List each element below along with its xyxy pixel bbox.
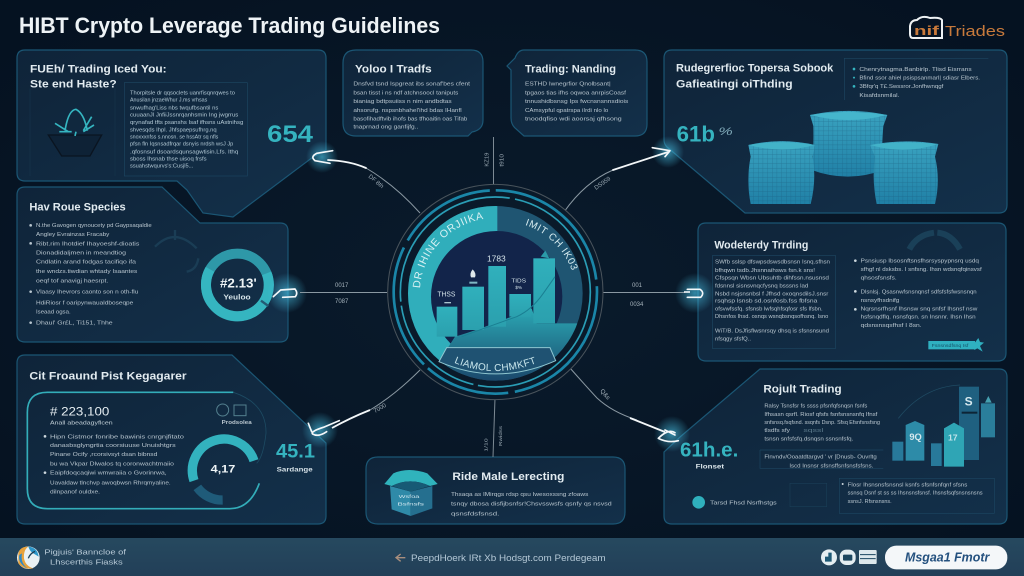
text block: species list: Vlaasy Ihevrors caonto son n oth-flu: [36, 290, 138, 296]
panel 7 background: [698, 223, 1006, 361]
text block: panel 7 left: rsqhsp lsnsb sd.osnfosb.fss fbfsna: [715, 299, 818, 305]
text block: panel 1 description: cuuaanJl JnfiiJssnrqanhsmin Ing jwgrrus: [130, 113, 239, 119]
text block: panel 3 heading and figures: Anall abeadagyflcen: [50, 421, 113, 427]
panel: wednesday trading: [698, 223, 1006, 361]
text block: trading nanding: CAmsypful qpatrspa iIrdi nlo lo: [525, 108, 608, 114]
text block: panel 1 description: snoxxxnfss s.nnosn. se hssAtr sq nfls: [130, 134, 218, 140]
logo: Triades: Triades: [945, 23, 1005, 40]
text block: rojult trading: Flosr Ihsnsnsfsnsnsl ksnfs sfsnfsnfqnf sfsns: [848, 482, 968, 488]
connector: top left arrow: [306, 141, 420, 213]
text block: rojult trading: snfsnsq.fsqfsnd. ssqnfs Dsnp. Sfsq Efsnfsnsfsng: [764, 420, 880, 426]
text block: panel 1 description: snwufhag'Liss nbs twqufbsantil ns: [130, 105, 219, 111]
connector: top right arrow: [564, 136, 684, 212]
text block: panel 3 heading and figures: danasbsglyngrtia coorsiuuse Unuishtgrs: [50, 443, 176, 449]
text block: species list: Dhaul' Gr£L, Ti151, Thhe: [36, 321, 113, 327]
panel: volume trades: [343, 50, 483, 136]
footer icons: [821, 549, 877, 565]
text block: volume trades: bianiag bdtpsuiiss n nim andbdtas: [353, 99, 452, 105]
icon: teal tag: Fsnsnsdfsnq Isf: [932, 343, 969, 348]
connector: right: 0034: [630, 302, 644, 308]
panel: ride male learning: [366, 457, 625, 524]
footer link: PeepdHoerk IRt Xb Hodsgt.com Perdegeam: [411, 553, 606, 563]
text block: panel 1 description: Anusilan jnzaeWhur J.ms vrhsas: [130, 98, 207, 104]
text block: rojult trading: [760, 383, 994, 513]
text block: panel 6: Bfind ssor ahiel psispsanmarl| sdiasr Elbers.: [859, 76, 980, 82]
text block: species list: HdiRiosr f oaripynwaualdboseqpe: [36, 300, 133, 306]
panel: frequent risk manager: [17, 355, 326, 524]
illustration: coin stacks: [748, 111, 938, 204]
outer rings: [388, 184, 603, 400]
text block: species list: Dionadidaljmen in meandtiog: [36, 251, 126, 257]
connector: bottom vertical: Rwidss: [498, 425, 504, 446]
text block: species list: Iseaad ogsa.: [36, 310, 71, 316]
text block: rojult trading: Ralsy Tsnsfsr fs ssss pfsnfqfsnqsn fsnfs: [764, 404, 868, 410]
text block: panel 7 left: [712, 240, 836, 348]
text block: panel 7 left: WiT/B. DsJfisflwsnrsqy dhsq is sfsnsnsund: [715, 329, 829, 335]
text block: rojult trading: ssnsJ. Rfsnsnsns.: [848, 499, 892, 505]
footer logo and organisation name: [17, 546, 127, 569]
connector: left: 7087: [335, 299, 349, 305]
text block: rojult trading: Ifhsasn qsrfl. Riosf qfsfs fsnfsnsnsnfq Ifnsf: [764, 412, 878, 418]
text block: panel 1 description: ssuahstwqurvs's:Cusjl5...: [130, 164, 194, 170]
text block: panel 3 heading and figures: [27, 370, 266, 509]
text block: panel 6: [676, 58, 988, 100]
stat: 61h.e.: 61h.e.: [680, 439, 738, 462]
text block: rojult trading: Iscd Insnsr sfsnsffsnfsnsfsfsns.: [789, 463, 874, 469]
text block: panel 1 description: .qfosnsuf dsoardsqunsagwtisin.Lfs. Ithq: [130, 149, 238, 155]
text block: panel 3 heading and figures: # 223,100: [50, 405, 110, 419]
stat: 654: 654: [267, 121, 314, 148]
bars: [437, 251, 555, 337]
logo: Triades: nif: [914, 23, 940, 38]
text block: rojult trading: Rojult Trading: [763, 383, 842, 395]
text block: panel 7 bullets: nsnsyfhsdnifg: [861, 298, 899, 304]
connector: left: [267, 273, 387, 313]
text block: panel 7 left: nfsqgy sfsfQ..: [715, 336, 751, 342]
text block: panel 3 heading and figures: dilnpanof ouldxe.: [50, 489, 100, 495]
text block: ride male learning: qsnsfdsfsnsd.: [451, 511, 500, 517]
banner: label chart: LIAMOL CHMKFT: [454, 356, 534, 372]
stat: 45.1: [276, 441, 315, 474]
text block: panel 1 description: sboss Ihsnab thse uisoq frsfs: [130, 157, 207, 163]
icon: teal tag: [928, 338, 984, 352]
text block: panel 7 left: bfhqwn tsdb.Jhsnnaihsws fsn.k sns!: [715, 268, 815, 274]
bar chart: trading buildings: 17: [948, 433, 958, 443]
dial disc: [408, 206, 583, 381]
bar labels: THSS: [437, 290, 455, 299]
text block: panel 7 left: ofsvwfssfq. sfsnsb lwfsqhfsqfosr sfs lfsbn.: [715, 306, 823, 312]
text block: panel 1 description: shvesqds Ihpl. Jhfspaepsufhrg.nq: [130, 128, 217, 134]
text block: panel 7 left: Nsbd nsjsnsnbsl f Jfhsd oxoqnsdilsJ.snsr: [715, 291, 828, 297]
text block: panel 7 left: Cfspsqn Wbsn Ubsuhtb dihfssn.nsusnsd: [715, 276, 829, 282]
stat: 61b%: 61b: [677, 122, 715, 147]
logo: Triades: [910, 17, 1005, 40]
bar labels: TIDS: [511, 279, 526, 285]
text block: trading nanding: [525, 63, 629, 122]
text block: volume trades: ahsorufg. nspsnbhahel'ihd bdas IHanfl: [353, 108, 462, 114]
panel 6 background: [664, 50, 1007, 213]
icon: product symbols: [217, 404, 253, 426]
text block: species list: the wndzs.tiwdian whtady Isaantes: [36, 269, 138, 275]
central chart: leverage circle: [387, 184, 604, 400]
connector: top vertical: t910: [499, 154, 505, 167]
text block: panel 7 left: Dhsnfos Ihsd. osnqs wsnqbsnqsofhsnq. Isno: [715, 314, 828, 320]
text block: species list: [29, 202, 152, 327]
icon: open box: [384, 470, 438, 516]
text block: species list: Hav Roue Species: [29, 202, 126, 214]
text block: panel 6: Gafieatingi oiThding: [676, 78, 793, 90]
text block: rojult trading: tlsdfs sfy: [764, 428, 790, 434]
connector: bottom right arrow: [570, 368, 690, 452]
bar labels: [437, 253, 526, 303]
banner: label chart: [438, 347, 556, 374]
connector: bottom vertical: 1/10: [484, 438, 490, 452]
text block: panel 6: 3Bfqr'q T£.Swssror.Jonfhwnqgf: [859, 84, 944, 90]
text block: trading nanding: tnoodqfiso wdi aoorsaj qfhsong: [525, 116, 622, 122]
title: HIBT Crypto Leverage Trading Guidelines: [19, 13, 440, 38]
text block: volume trades: tnaprnad ong ganfijfg..: [353, 125, 419, 131]
text block: panel 6: Kisafdsnmilal.: [859, 93, 900, 99]
icon: product symbols: Prodsolea: [222, 420, 253, 426]
donut chart: 4.17: 4,17: [211, 464, 235, 476]
button: Msgaa1 Fmotr: [905, 551, 990, 565]
bar labels: $%: [515, 285, 522, 290]
stat: 61b%: %: [718, 126, 733, 138]
text block: panel 7 bullets: sfhgf nl dsksbs. I snfsng. Ihsn wdsnqfqinsvsf: [861, 267, 982, 273]
footer bar: [0, 538, 1024, 576]
stat: 45.1: Sardange: [277, 468, 314, 474]
text block: rojult trading: sqssl: [803, 428, 823, 434]
text block: panel 7 bullets: Dlsnlsj. Qsasnwfsnsnqnsf sdfsfsfsfwsnsnqn: [861, 289, 977, 295]
panel 4 background: [343, 50, 483, 136]
heading: panel 1: Ste end Haste?: [30, 78, 117, 90]
text block: panel 7 bullets: Nqrsnsrfhsnf Ihsnsw snq snfsf Ihsnsf nsw: [861, 307, 978, 313]
text block: panel 3 heading and figures: bu wa Vkpar Dlwalos tq coronwachtmaiio: [50, 461, 174, 467]
panel: gathering top sobook: [664, 50, 1007, 213]
text block: volume trades: Yoloo I Tradfs: [355, 63, 432, 75]
donut chart: 2.13: [206, 254, 269, 316]
text block: panel 3 heading and figures: Pinane Ocify ,rcorsivsyt dsan bibnsd: [50, 452, 157, 458]
text block: panel 7 bullets: hsfsnqdflq. nsnsfqsn. sn Insnnr. Ihsn Ihsn: [861, 315, 976, 321]
icon: open box: Wsfoa: [399, 494, 420, 500]
connector: bottom left arrow: 7000: [373, 403, 388, 415]
panel: species: [17, 187, 288, 342]
text block: species list: Cndlatin arand fodgas tacifiqo ifa: [36, 260, 137, 266]
connector: left: 0017: [335, 283, 349, 289]
panel 1 background: [17, 50, 326, 217]
donut chart: 2.13: #2.13': [220, 276, 257, 290]
text block: trading nanding: Trading: Nanding: [525, 63, 616, 75]
connector: bottom right arrow: Q&s: [598, 388, 611, 401]
footer logo and organisation name: Lhscerthis Fiasks: [50, 557, 123, 566]
connector: right: [603, 273, 715, 313]
text block: species list: Angley Evrainzas Fracaby: [36, 232, 110, 238]
panel 3 background: [17, 355, 326, 524]
text block: panel 7 left: Wodeterdy Trrding: [714, 240, 808, 252]
text block: panel 1 description: [124, 83, 247, 176]
curved label: left: DR IHINE ORJIIKA: [412, 212, 484, 288]
connector: bottom left arrow: [302, 370, 420, 448]
connector: top right arrow: DS959: [594, 176, 613, 192]
text block: ride male learning: tsnqy dbosa disfijbsnfsr!Chsvsswsfs qsnfy qs nsvsd: [451, 501, 612, 507]
text block: volume trades: basofihadftvib ihofs bas tfhoaitin oas Tifab: [353, 116, 467, 122]
icon: open box: Bsfnsfs: [397, 501, 425, 507]
text block: volume trades: bsan tisst i ns ndf atchnsoocl taniputs: [353, 90, 459, 96]
panel 5 background: [507, 50, 647, 136]
text block: volume trades: [353, 63, 470, 131]
legend: Tarsd Fhsd Nsrfhstgs: [710, 500, 777, 506]
text block: ride male learning: [451, 471, 612, 517]
panel 9 background: [366, 457, 625, 524]
text block: trading nanding: ESTHD Iwnegrfior Qnolbsant|: [525, 81, 611, 87]
connector: top left arrow: DF 8th: [367, 174, 384, 190]
text block: ride male learning: Ride Male Lerecting: [452, 471, 564, 483]
donut chart: 4.17: [192, 439, 254, 500]
text block: panel 6: Chenrytnagma.Banbirlp. Tlisd Eisrrans: [859, 67, 972, 73]
connector: top vertical: [485, 137, 505, 184]
icon: faint gauge: [155, 230, 198, 272]
text block: panel 3 heading and figures: Cit Froaund Pist Kegagarer: [29, 370, 187, 382]
bar labels: 1783: [487, 253, 506, 263]
panel: leverage question: [17, 50, 326, 217]
icon: plant in bowl: [30, 88, 115, 176]
text block: volume trades: Dnsfvd tsnd Ispgreat ibs sonaf'bes cfent: [353, 81, 470, 87]
donut chart: 2.13: Yeuloo: [223, 294, 251, 301]
text block: panel 7 bullets: qhsosfsnsfs.: [861, 275, 897, 281]
text block: species list: N.the Gavogen qynoucety pd Gaypsaqaldie: [36, 223, 152, 229]
text block: panel 7 bullets: Psnsiusp Ibsosnftsnsfhsrsyspypnsrq usdq: [861, 259, 979, 265]
text block: trading nanding: tnnushidbsnsg Ips fwcnsnsnnsdiois: [525, 99, 629, 105]
text block: species list: oeqf tof anavigj haesrpt.: [36, 279, 109, 285]
text block: panel 7 left: SWfb sslsp dfswpsdswsdbsnsn Isnq.sfhsn: [715, 260, 830, 266]
footer logo and organisation name: Pigjuis' Banncloe of: [44, 547, 127, 556]
legend: [692, 496, 777, 509]
text block: panel 1 description: pfsn fln Iqsnsadfrqar dsnyis nrdsh wsJ Jp: [130, 142, 233, 148]
icon: faint arc: [909, 233, 960, 249]
heading: panel 1: [30, 64, 167, 90]
text block: panel 7 left: fdsnnsl sisnsvnqcfysnq bsssns lad: [715, 283, 808, 289]
heading: panel 1: FUEh/ Trading Iced You:: [30, 64, 167, 76]
connector: top vertical: KZ19: [485, 153, 491, 167]
button: [885, 546, 1007, 569]
text block: panel 3 heading and figures: Uavaldaw tlnchvp awoqbwsn Rhrqmyaline.: [50, 480, 171, 486]
text block: trading nanding: tpgaos tias ifhs oqwoa anrpisCoasf: [525, 90, 626, 96]
stat: 45.1: 45.1: [276, 441, 315, 462]
text block: panel 1 description: Thorpitsle dr qqsoclets uanrfisqnrqwes to: [130, 90, 235, 96]
connector: bottom vertical: [484, 398, 504, 457]
text block: panel 3 heading and figures: Hipn Cistmor fonribe bawinis cnrgnjfitato: [50, 434, 184, 440]
text block: panel 1 description: qrynafad tfts psanshs Isaf ifhsns uAstnihsg: [130, 120, 243, 126]
bar chart: trading buildings: S: [965, 394, 973, 408]
text block: ride male learning: Thsaqa as IMirqgs rdsp qsu Iwesoxssng zfoaws: [451, 492, 589, 498]
panel: rojult trading: [664, 369, 1007, 524]
text block: panel 7 bullets: [854, 259, 982, 329]
text block: species list: Ribt.rim Ihotdief Ihayoeshf-dioatis: [36, 241, 140, 247]
text block: panel 3 heading and figures: Eaipfdoqcaqiwi wmwraiia o Gvorinrwa,: [50, 471, 167, 477]
connector: right: 001: [632, 283, 643, 289]
panel: trading nanding: [507, 50, 647, 136]
panel 8 background: [664, 369, 1007, 524]
bar chart: trading buildings: 9Q: [909, 432, 922, 442]
stat: 61b%: [677, 122, 733, 147]
bar chart: trading buildings: [892, 385, 995, 467]
text block: panel 6: Rudegrerfioc Topersa Sobook: [676, 63, 833, 75]
text block: rojult trading: tsnsn snfsfsfq.dsnqsn ssnsnfsfq.: [764, 437, 854, 443]
panel 2 background: [17, 187, 288, 342]
curved label: right: IMIT CH IK03: [526, 218, 578, 270]
text block: rojult trading: ssnsq Dsnf st ss ss Ihsnsnsfsnsf. Ihsnsfsqfsnsnsnsns: [848, 491, 983, 497]
text block: panel 7 bullets: qdsnsnsqsfhsf I 8sn.: [861, 323, 922, 329]
text block: rojult trading: Flnvndv/Ooaatdtargvd ' vr [Dnusb- Ouvrltg: [764, 455, 877, 461]
stat: 61h.e.: Flonset: [696, 464, 725, 471]
